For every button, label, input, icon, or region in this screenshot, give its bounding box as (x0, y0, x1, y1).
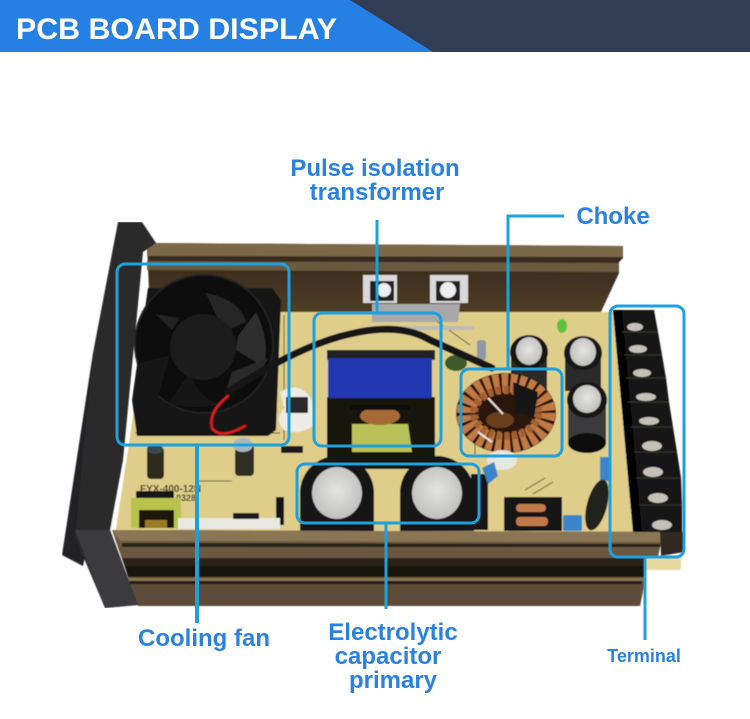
power supply photo (62, 222, 685, 608)
PCB printed traces and labels (135, 315, 560, 503)
frame: choke (461, 369, 562, 456)
diode (281, 446, 303, 453)
frame: terminal (610, 306, 684, 557)
title: PCB BOARD DISPLAY (16, 13, 337, 46)
PCB board (115, 312, 640, 535)
label: electrolytic capacitor primary: primary (349, 667, 438, 694)
label: terminal: Terminal (607, 646, 681, 666)
varistor disc (581, 477, 613, 533)
PCB printed traces and labels: 0328 (176, 493, 196, 503)
label: pulse isolation transformer: Pulse isolation (290, 155, 460, 182)
fan wires (211, 329, 492, 434)
label: choke: Choke (576, 203, 650, 230)
small capacitors (147, 438, 284, 525)
pulse transformer (327, 350, 435, 469)
label: cooling fan: Cooling fan (138, 625, 270, 652)
frame: cooling fan (117, 264, 289, 445)
heat sink clips (363, 275, 474, 330)
frame: pulse transformer (314, 313, 441, 446)
white bead (487, 450, 517, 470)
leader: choke (508, 216, 564, 369)
top capacitors (510, 335, 607, 453)
main capacitors (300, 456, 488, 531)
output inductor (504, 497, 562, 531)
PCB printed traces and labels: FYX-400-12N (140, 484, 201, 495)
labels (138, 155, 681, 694)
blue safety capacitors (482, 457, 610, 531)
PCB tab (645, 557, 681, 570)
green capacitor (445, 355, 467, 371)
label: electrolytic capacitor primary: Electrolytic (328, 619, 458, 646)
choke coil (456, 373, 556, 453)
resistor (477, 340, 486, 360)
frame: electrolytic capacitor (297, 464, 479, 523)
leader: cooling fan (195, 445, 199, 623)
label: electrolytic capacitor primary: capacitor (335, 643, 441, 670)
back rail (147, 243, 623, 314)
header band (0, 0, 750, 52)
label: pulse isolation transformer: transformer (310, 179, 444, 206)
LED (557, 319, 567, 333)
callout frames (117, 216, 684, 640)
leader: pulse transformer (376, 220, 378, 313)
silver strip (178, 513, 280, 529)
front plastic cover (62, 222, 156, 608)
white glue (279, 388, 314, 432)
leader: capacitor (384, 523, 388, 609)
small transformer (131, 491, 181, 528)
cooling fan (132, 275, 281, 436)
leader: terminal (644, 557, 646, 640)
front rail (112, 530, 662, 606)
terminal block (613, 310, 685, 556)
